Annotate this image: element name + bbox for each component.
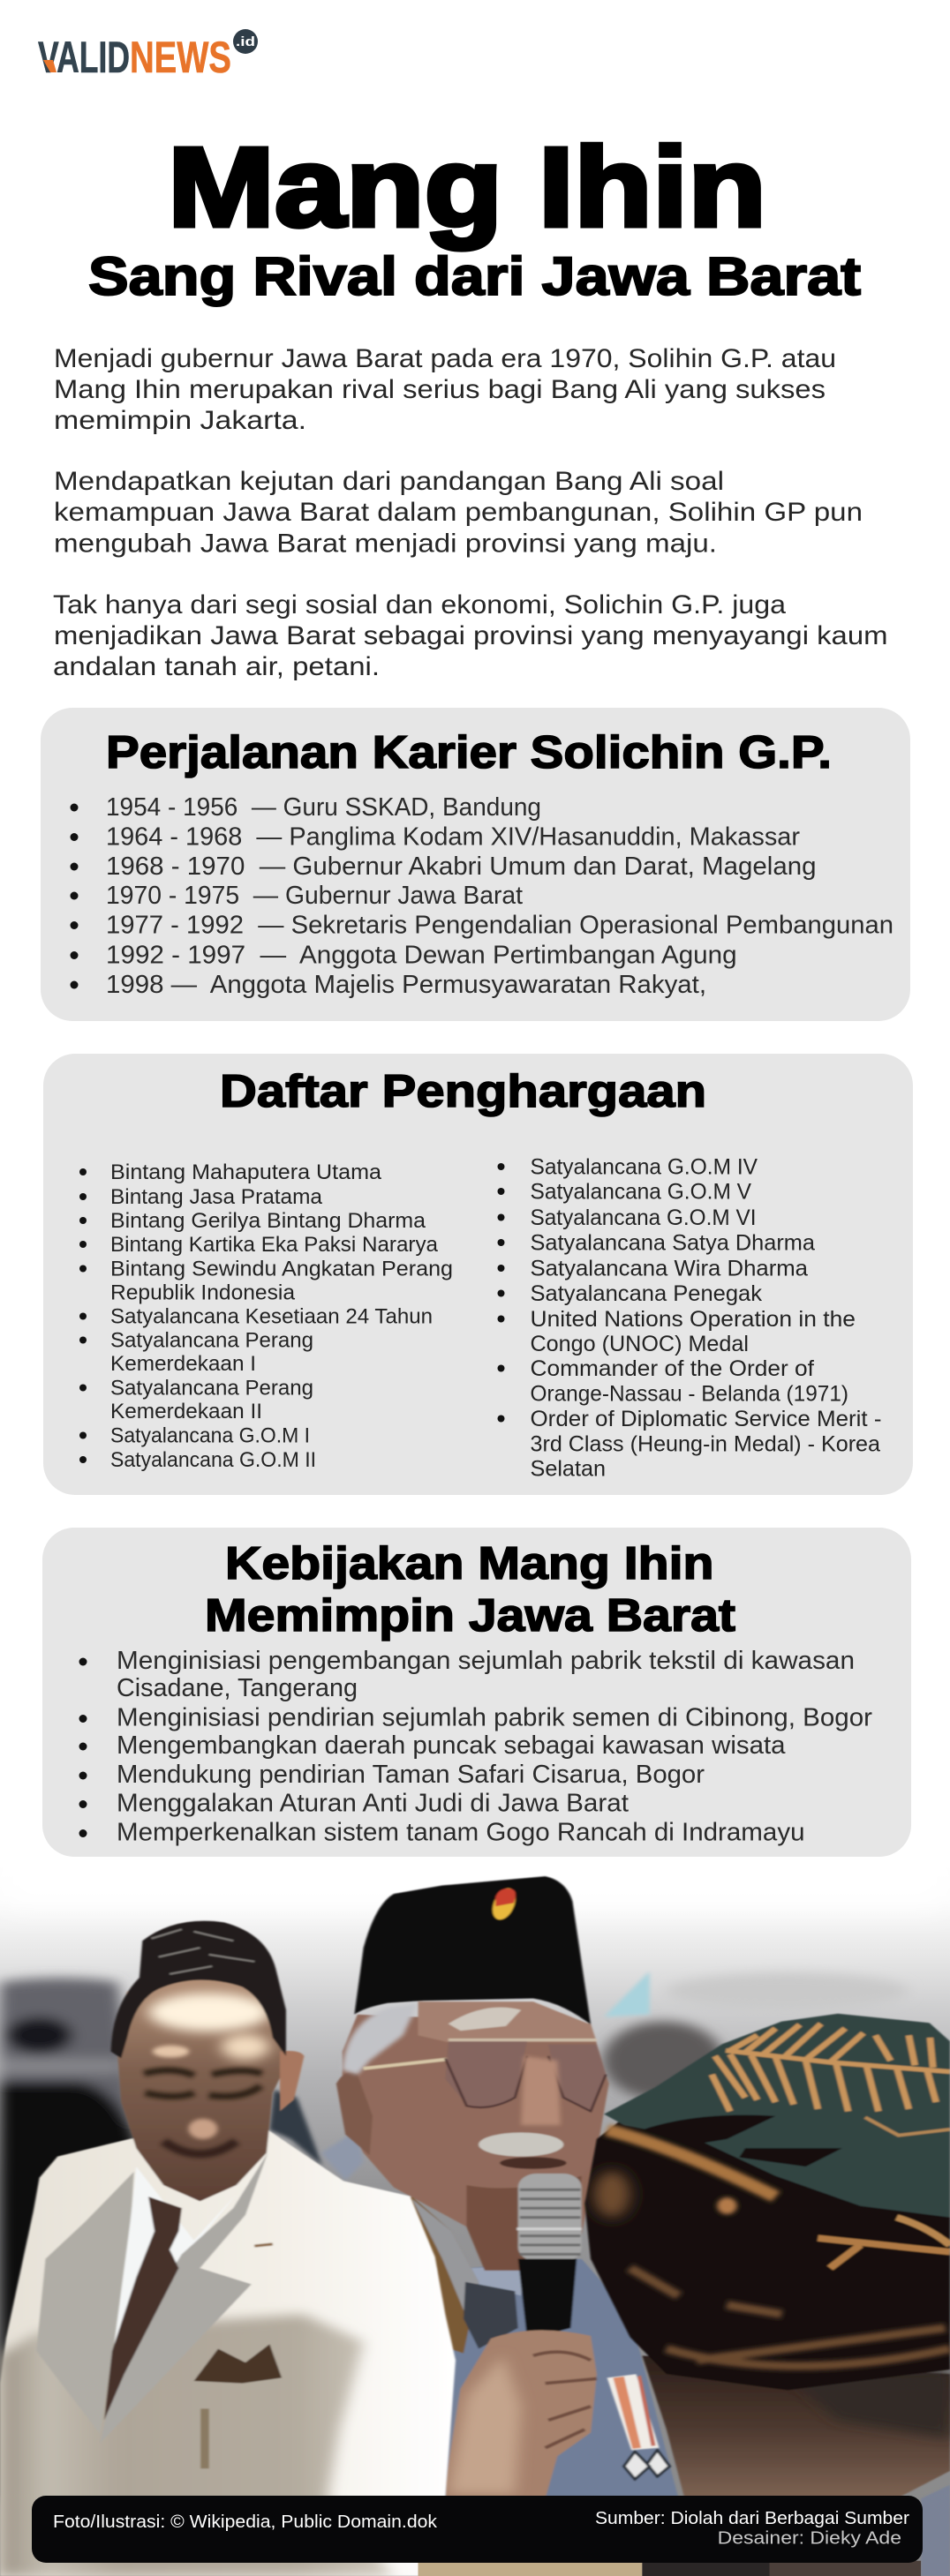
heading: career: Perjalanan Karier Solichin G.P. bbox=[106, 727, 832, 778]
man 1: smiling man in light suit bbox=[0, 1921, 456, 2576]
awards list right column: Satyalancana G.O.M IV bbox=[530, 1154, 758, 1179]
awards list right column: Congo (UNOC) Medal bbox=[530, 1332, 749, 1356]
heading: policies: Kebijakan Mang Ihin bbox=[225, 1538, 713, 1589]
intro text block: memimpin Jakarta. bbox=[54, 406, 306, 435]
logo: VALIDNEWS.id: .id bbox=[236, 34, 255, 49]
awards list left column: Satyalancana G.O.M I bbox=[110, 1424, 310, 1447]
heading: policies: Memimpin Jawa Barat bbox=[205, 1590, 735, 1641]
awards list left column: Satyalancana Perang bbox=[110, 1377, 313, 1400]
policies list bbox=[79, 1647, 872, 1847]
logo: VALIDNEWS.id: VALID bbox=[38, 33, 130, 82]
awards list left column: Kemerdekaan I bbox=[110, 1352, 256, 1376]
man 2 medals bbox=[607, 2374, 669, 2479]
intro text block: menjadikan Jawa Barat sebagai provinsi yang menyayangi kaum bbox=[54, 621, 888, 650]
awards list right column: Order of Diplomatic Service Merit - bbox=[530, 1407, 881, 1431]
awards list left column: Satyalancana Perang bbox=[110, 1329, 313, 1352]
awards list right column: Satyalancana G.O.M V bbox=[530, 1180, 751, 1205]
heading: awards: Daftar Penghargaan bbox=[220, 1066, 706, 1117]
awards list right column: Satyalancana G.O.M VI bbox=[530, 1205, 756, 1230]
intro text block bbox=[53, 344, 888, 681]
career list: 1968 - 1970 — Gubernur Akabri Umum dan Darat, Magelang bbox=[106, 852, 816, 881]
intro text block: kemampuan Jawa Barat dalam pembangunan, Solihin GP pun bbox=[54, 498, 863, 527]
awards list right column: Satyalancana Wira Dharma bbox=[530, 1257, 808, 1281]
awards list left column: Bintang Kartika Eka Paksi Nararya bbox=[110, 1233, 439, 1257]
awards list right column: Satyalancana Satya Dharma bbox=[530, 1231, 815, 1256]
panel: career path bbox=[41, 708, 910, 1021]
intro text block: Mang Ihin merupakan rival serius bagi Bang Ali yang sukses bbox=[54, 375, 826, 404]
photo collage: three men bbox=[0, 1853, 950, 2576]
career list: 1998 — Anggota Majelis Permusyawaratan Rakyat, bbox=[106, 971, 706, 999]
policies list: Menggalakan Aturan Anti Judi di Jawa Barat bbox=[117, 1790, 629, 1818]
policies list: Memperkenalkan sistem tanam Gogo Rancah di Indramayu bbox=[117, 1819, 805, 1847]
policies list: Cisadane, Tangerang bbox=[117, 1674, 358, 1702]
panel: policies bbox=[42, 1528, 911, 1857]
career list: 1970 - 1975 — Gubernur Jawa Barat bbox=[106, 882, 523, 910]
cyan flag fragment bbox=[604, 1971, 650, 2016]
intro text block: Tak hanya dari segi sosial dan ekonomi, Solichin G.P. juga bbox=[53, 590, 786, 620]
intro text block: Menjadi gubernur Jawa Barat pada era 1970, Solihin G.P. atau bbox=[54, 344, 836, 373]
awards list right column: Orange-Nassau - Belanda (1971) bbox=[530, 1382, 848, 1407]
career list bbox=[71, 793, 893, 999]
awards list right column: Commander of the Order of bbox=[530, 1356, 814, 1381]
photo credit: Foto/Ilustrasi: © Wikipedia, Public Domain.dok bbox=[53, 2512, 438, 2532]
designer credit: Desainer: Dieky Ade bbox=[718, 2528, 901, 2549]
logo: VALIDNEWS.id bbox=[38, 29, 258, 82]
awards list right column: United Nations Operation in the bbox=[530, 1307, 856, 1332]
heading: policies bbox=[205, 1538, 735, 1641]
career list: 1964 - 1968 — Panglima Kodam XIV/Hasanuddin, Makassar bbox=[106, 822, 800, 851]
man 2: speaker with peci and microphone bbox=[336, 1876, 679, 2498]
policies list: Menginisiasi pengembangan sejumlah pabrik tekstil di kawasan bbox=[117, 1647, 855, 1675]
subtitle: Sang Rival dari Jawa Barat bbox=[88, 246, 861, 306]
awards list left column: Satyalancana G.O.M II bbox=[110, 1448, 316, 1472]
intro text block: Mendapatkan kejutan dari pandangan Bang Ali soal bbox=[54, 467, 724, 496]
background figure shoulder bbox=[269, 2090, 364, 2181]
logo: VALIDNEWS.id: NEWS bbox=[130, 33, 231, 82]
intro text block: andalan tanah air, petani. bbox=[53, 652, 380, 681]
awards list right column: Selatan bbox=[530, 1457, 606, 1482]
source credit: Sumber: Diolah dari Berbagai Sumber bbox=[595, 2508, 909, 2528]
awards list left column: Republik Indonesia bbox=[110, 1281, 296, 1304]
awards list right column: Satyalancana Penegak bbox=[530, 1281, 762, 1306]
career list: 1954 - 1956 — Guru SSKAD, Bandung bbox=[106, 793, 541, 822]
awards list left column: Satyalancana Kesetiaan 24 Tahun bbox=[110, 1304, 433, 1329]
awards list left column: Bintang Sewindu Angkatan Perang bbox=[110, 1257, 453, 1281]
career list: 1977 - 1992 — Sekretaris Pengendalian Operasional Pembangunan bbox=[106, 911, 893, 939]
awards list left column: Bintang Mahaputera Utama bbox=[110, 1160, 382, 1184]
policies list: Mengembangkan daerah puncak sebagai kawasan wisata bbox=[117, 1731, 786, 1760]
title: Mang Ihin bbox=[168, 124, 766, 251]
footer bar with credits bbox=[32, 2496, 923, 2563]
intro text block: mengubah Jawa Barat menjadi provinsi yang maju. bbox=[54, 529, 717, 558]
awards list right column bbox=[498, 1154, 881, 1482]
man 3: foreground man with batik headcloth bbox=[584, 2014, 950, 2576]
panel: awards bbox=[43, 1054, 913, 1495]
career list: 1992 - 1997 — Anggota Dewan Pertimbangan Agung bbox=[106, 941, 737, 969]
awards list left column: Bintang Jasa Pratama bbox=[110, 1185, 323, 1209]
awards list left column: Kemerdekaan II bbox=[110, 1400, 262, 1423]
awards list left column: Bintang Gerilya Bintang Dharma bbox=[110, 1209, 426, 1233]
background blurred crowd bbox=[0, 1973, 909, 2498]
strip below footer bbox=[418, 2561, 921, 2576]
policies list: Mendukung pendirian Taman Safari Cisarua, Bogor bbox=[117, 1761, 705, 1789]
awards list right column: 3rd Class (Heung-in Medal) - Korea bbox=[530, 1431, 880, 1456]
awards list left column bbox=[79, 1160, 453, 1472]
policies list: Menginisiasi pendirian sejumlah pabrik semen di Cibinong, Bogor bbox=[117, 1704, 872, 1732]
